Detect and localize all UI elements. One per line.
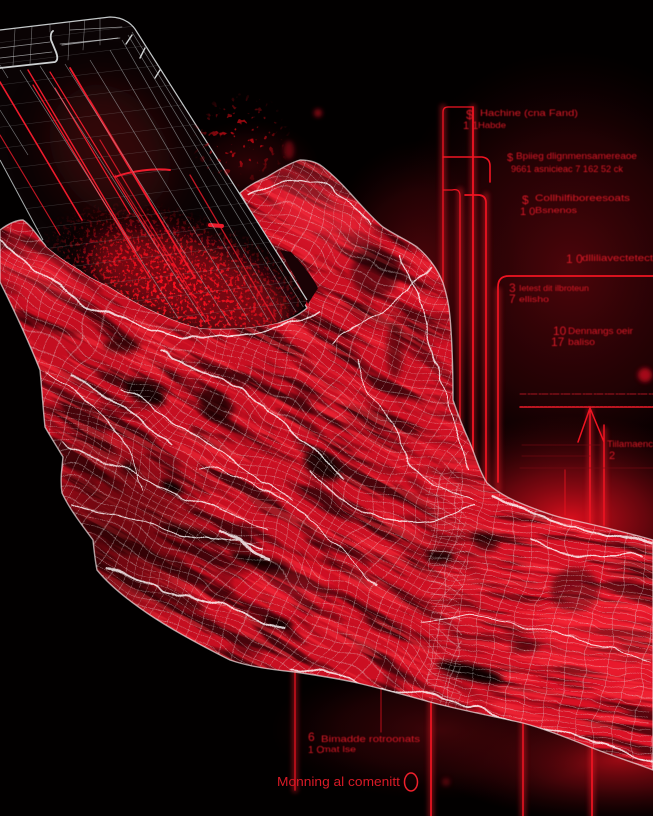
wireframe hand and forearm — [0, 160, 653, 770]
callout 3: 1 0 — [520, 206, 535, 218]
red schematic leader lines — [295, 107, 653, 816]
palm streak texture — [299, 400, 301, 402]
phone outer edge — [0, 17, 307, 300]
callout 4 — [566, 252, 653, 266]
callout 5: 3 — [509, 281, 516, 295]
labels: bottom callout: 1 C — [308, 745, 324, 756]
debris particles drifting off the phone — [193, 93, 290, 186]
callout 6: baliso — [568, 337, 595, 347]
callout 6: 17 — [551, 335, 565, 349]
forearm streak texture — [500, 600, 501, 602]
callout 7 — [607, 439, 653, 462]
callout 4: 1 0 — [566, 252, 583, 266]
callout 3 — [520, 193, 631, 218]
phone body — [0, 17, 307, 329]
callout 7: 2 — [609, 450, 615, 462]
callout 4: dlliliavectetect — [582, 253, 653, 263]
callout 1: Hachine (cna Fand) — [480, 108, 578, 118]
callout 6: 10 — [553, 324, 567, 338]
callout 1: Habde — [478, 121, 507, 130]
callout 2: $ — [507, 152, 513, 164]
hand rim — [0, 160, 653, 770]
callout 3: $ — [522, 193, 529, 207]
red particle cloud on screen — [45, 202, 306, 329]
bottom headline with zero badge — [277, 773, 418, 791]
palm mesh — [0, 160, 470, 708]
background glow behind the hand and forearm — [180, 50, 653, 816]
callout 3: Bsnenos — [535, 206, 577, 215]
red haze on screen — [77, 218, 302, 329]
screen grid — [0, 26, 306, 318]
callout 5: Ietest dit ilbroteun — [519, 283, 589, 293]
labels: top callouts — [463, 107, 653, 462]
bright tissue highlights — [0, 151, 653, 690]
callout 2: Bpiieg dlignmensamereaoe — [516, 151, 637, 161]
dark folds between fingers — [104, 247, 599, 688]
callout 6: Dennangs oeir — [568, 326, 633, 336]
callout 7: Tiilamaenc — [607, 439, 653, 449]
callout 5: ellisho — [519, 294, 549, 304]
floating glow dots — [284, 109, 652, 786]
callout 6 — [551, 324, 633, 349]
callout 2 — [507, 151, 637, 174]
thumb gap — [280, 250, 318, 304]
bottom headline with zero badge: Monning al comenitt — [277, 774, 400, 789]
callout 2: 9661 asnicieac 7 162 52 ck — [511, 164, 624, 174]
pale long wires along the phone — [0, 32, 304, 325]
red screen streaks — [0, 68, 275, 325]
callout 3: Collhilfiboreesoats — [535, 193, 631, 203]
callout 5: 7 — [509, 292, 516, 306]
callout 1 — [463, 107, 578, 132]
labels: bottom callout: 6 — [308, 730, 315, 744]
callout 1: 1 1 — [463, 120, 478, 132]
callout 5 — [509, 281, 589, 306]
callout 1: $ — [466, 107, 474, 122]
white wire strands — [0, 180, 653, 762]
phone top notch and rim — [0, 17, 160, 78]
labels: bottom callout — [308, 730, 421, 756]
shaded lower fingers — [50, 450, 190, 610]
wireframe phone — [0, 16, 308, 329]
labels: bottom callout: Bimadde rotroonats — [321, 734, 421, 744]
forearm mesh — [430, 470, 653, 780]
labels: bottom callout: mat lse — [322, 744, 356, 754]
